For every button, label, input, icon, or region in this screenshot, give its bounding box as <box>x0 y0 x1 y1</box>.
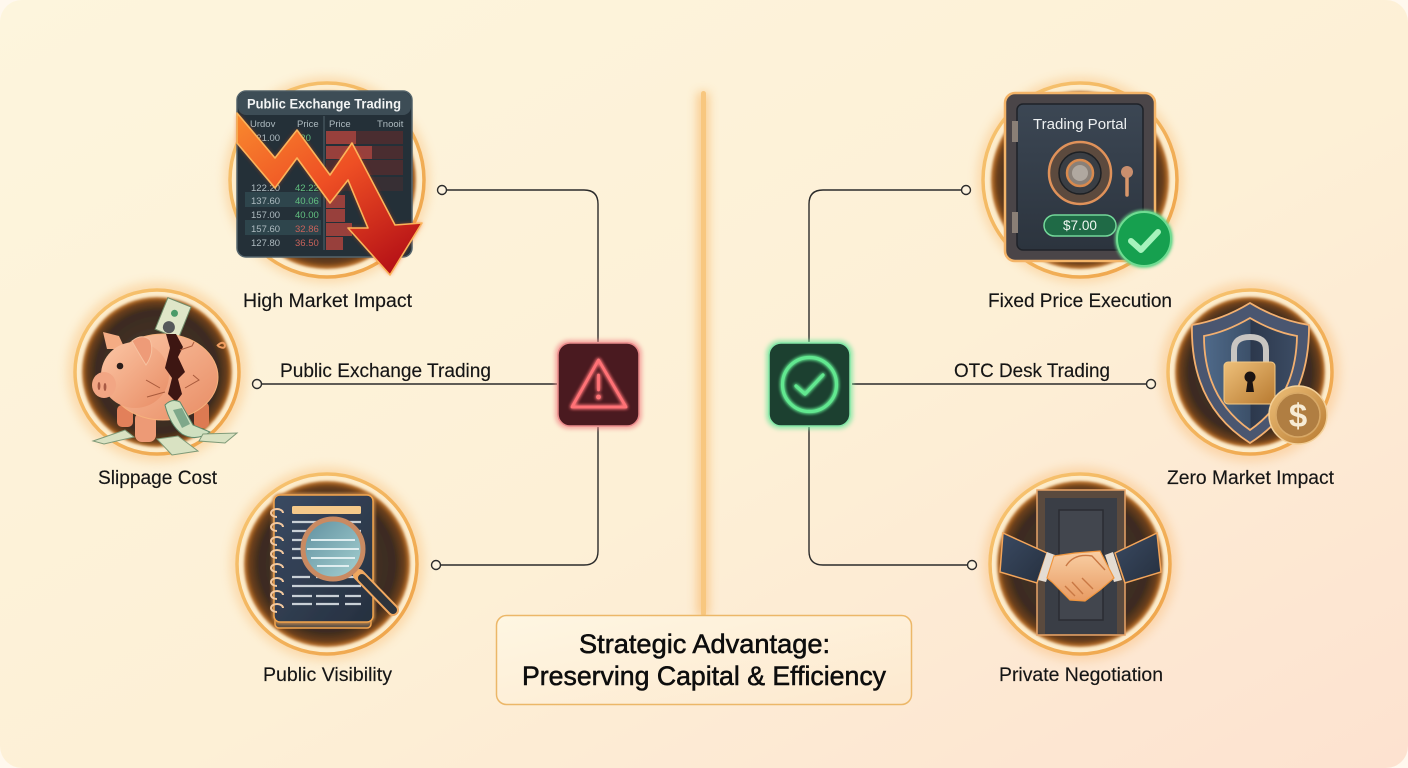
label: zero market impact: Zero Market Impact <box>1167 468 1335 489</box>
callout: strategic advantage: Preserving Capital & Efficiency <box>522 661 886 691</box>
icon: market impact trading board: Price <box>297 119 319 130</box>
label: public exchange trading: Public Exchange Trading <box>280 361 491 382</box>
icon: market impact trading board: 137.60 <box>251 196 280 207</box>
icon: market impact trading board: 36.50 <box>295 238 319 249</box>
icon: shield lock and coin: $ <box>1289 397 1307 434</box>
icon: market impact trading board: Tnooit <box>377 119 404 130</box>
icon: market impact trading board: Public Exchange Trading <box>247 96 401 112</box>
icon: market impact trading board: 40.00 <box>295 210 319 221</box>
icon: broken piggy bank <box>67 282 247 462</box>
icon: market impact trading board <box>224 77 430 283</box>
icon: private handshake <box>983 467 1177 661</box>
icon: market impact trading board: 420 <box>295 133 311 144</box>
center divider <box>697 91 709 616</box>
connectors: public exchange trading <box>252 186 598 570</box>
icon: market impact trading board: Urdov <box>250 119 276 130</box>
label: high market impact: High Market Impact <box>243 291 413 312</box>
icon: market impact trading board: 157.60 <box>251 224 280 235</box>
label: fixed price execution: Fixed Price Execution <box>988 291 1172 312</box>
label: private negotiation: Private Negotiation <box>999 665 1163 686</box>
label: OTC desk trading: OTC Desk Trading <box>954 361 1110 382</box>
icon: market impact trading board: 121.00 <box>251 133 280 144</box>
badge: public exchange trading warning <box>555 340 642 429</box>
icon: market impact trading board: 122.20 <box>251 183 280 194</box>
icon: notebook with magnifier <box>230 467 424 661</box>
icon: market impact trading board: 157.00 <box>251 210 280 221</box>
icon: market impact trading board: 40.06 <box>295 196 319 207</box>
icon: trading portal safe <box>977 77 1183 283</box>
icon: market impact trading board: 42.22 <box>295 183 319 194</box>
callout: strategic advantage <box>496 616 912 704</box>
badge: OTC desk check <box>766 340 853 429</box>
icon: shield lock and coin <box>1160 282 1340 462</box>
icon: market impact trading board: Price <box>329 119 351 130</box>
icon: trading portal safe: Trading Portal <box>1033 117 1127 133</box>
connectors: OTC desk trading <box>809 186 1156 570</box>
callout: strategic advantage: Strategic Advantage: <box>579 629 830 659</box>
label: public visibility: Public Visibility <box>263 665 393 686</box>
icon: market impact trading board: 127.80 <box>251 238 280 249</box>
icon: market impact trading board: 32.86 <box>295 224 319 235</box>
label: slippage cost: Slippage Cost <box>98 468 218 489</box>
icon: trading portal safe: $7.00 <box>1063 218 1097 233</box>
